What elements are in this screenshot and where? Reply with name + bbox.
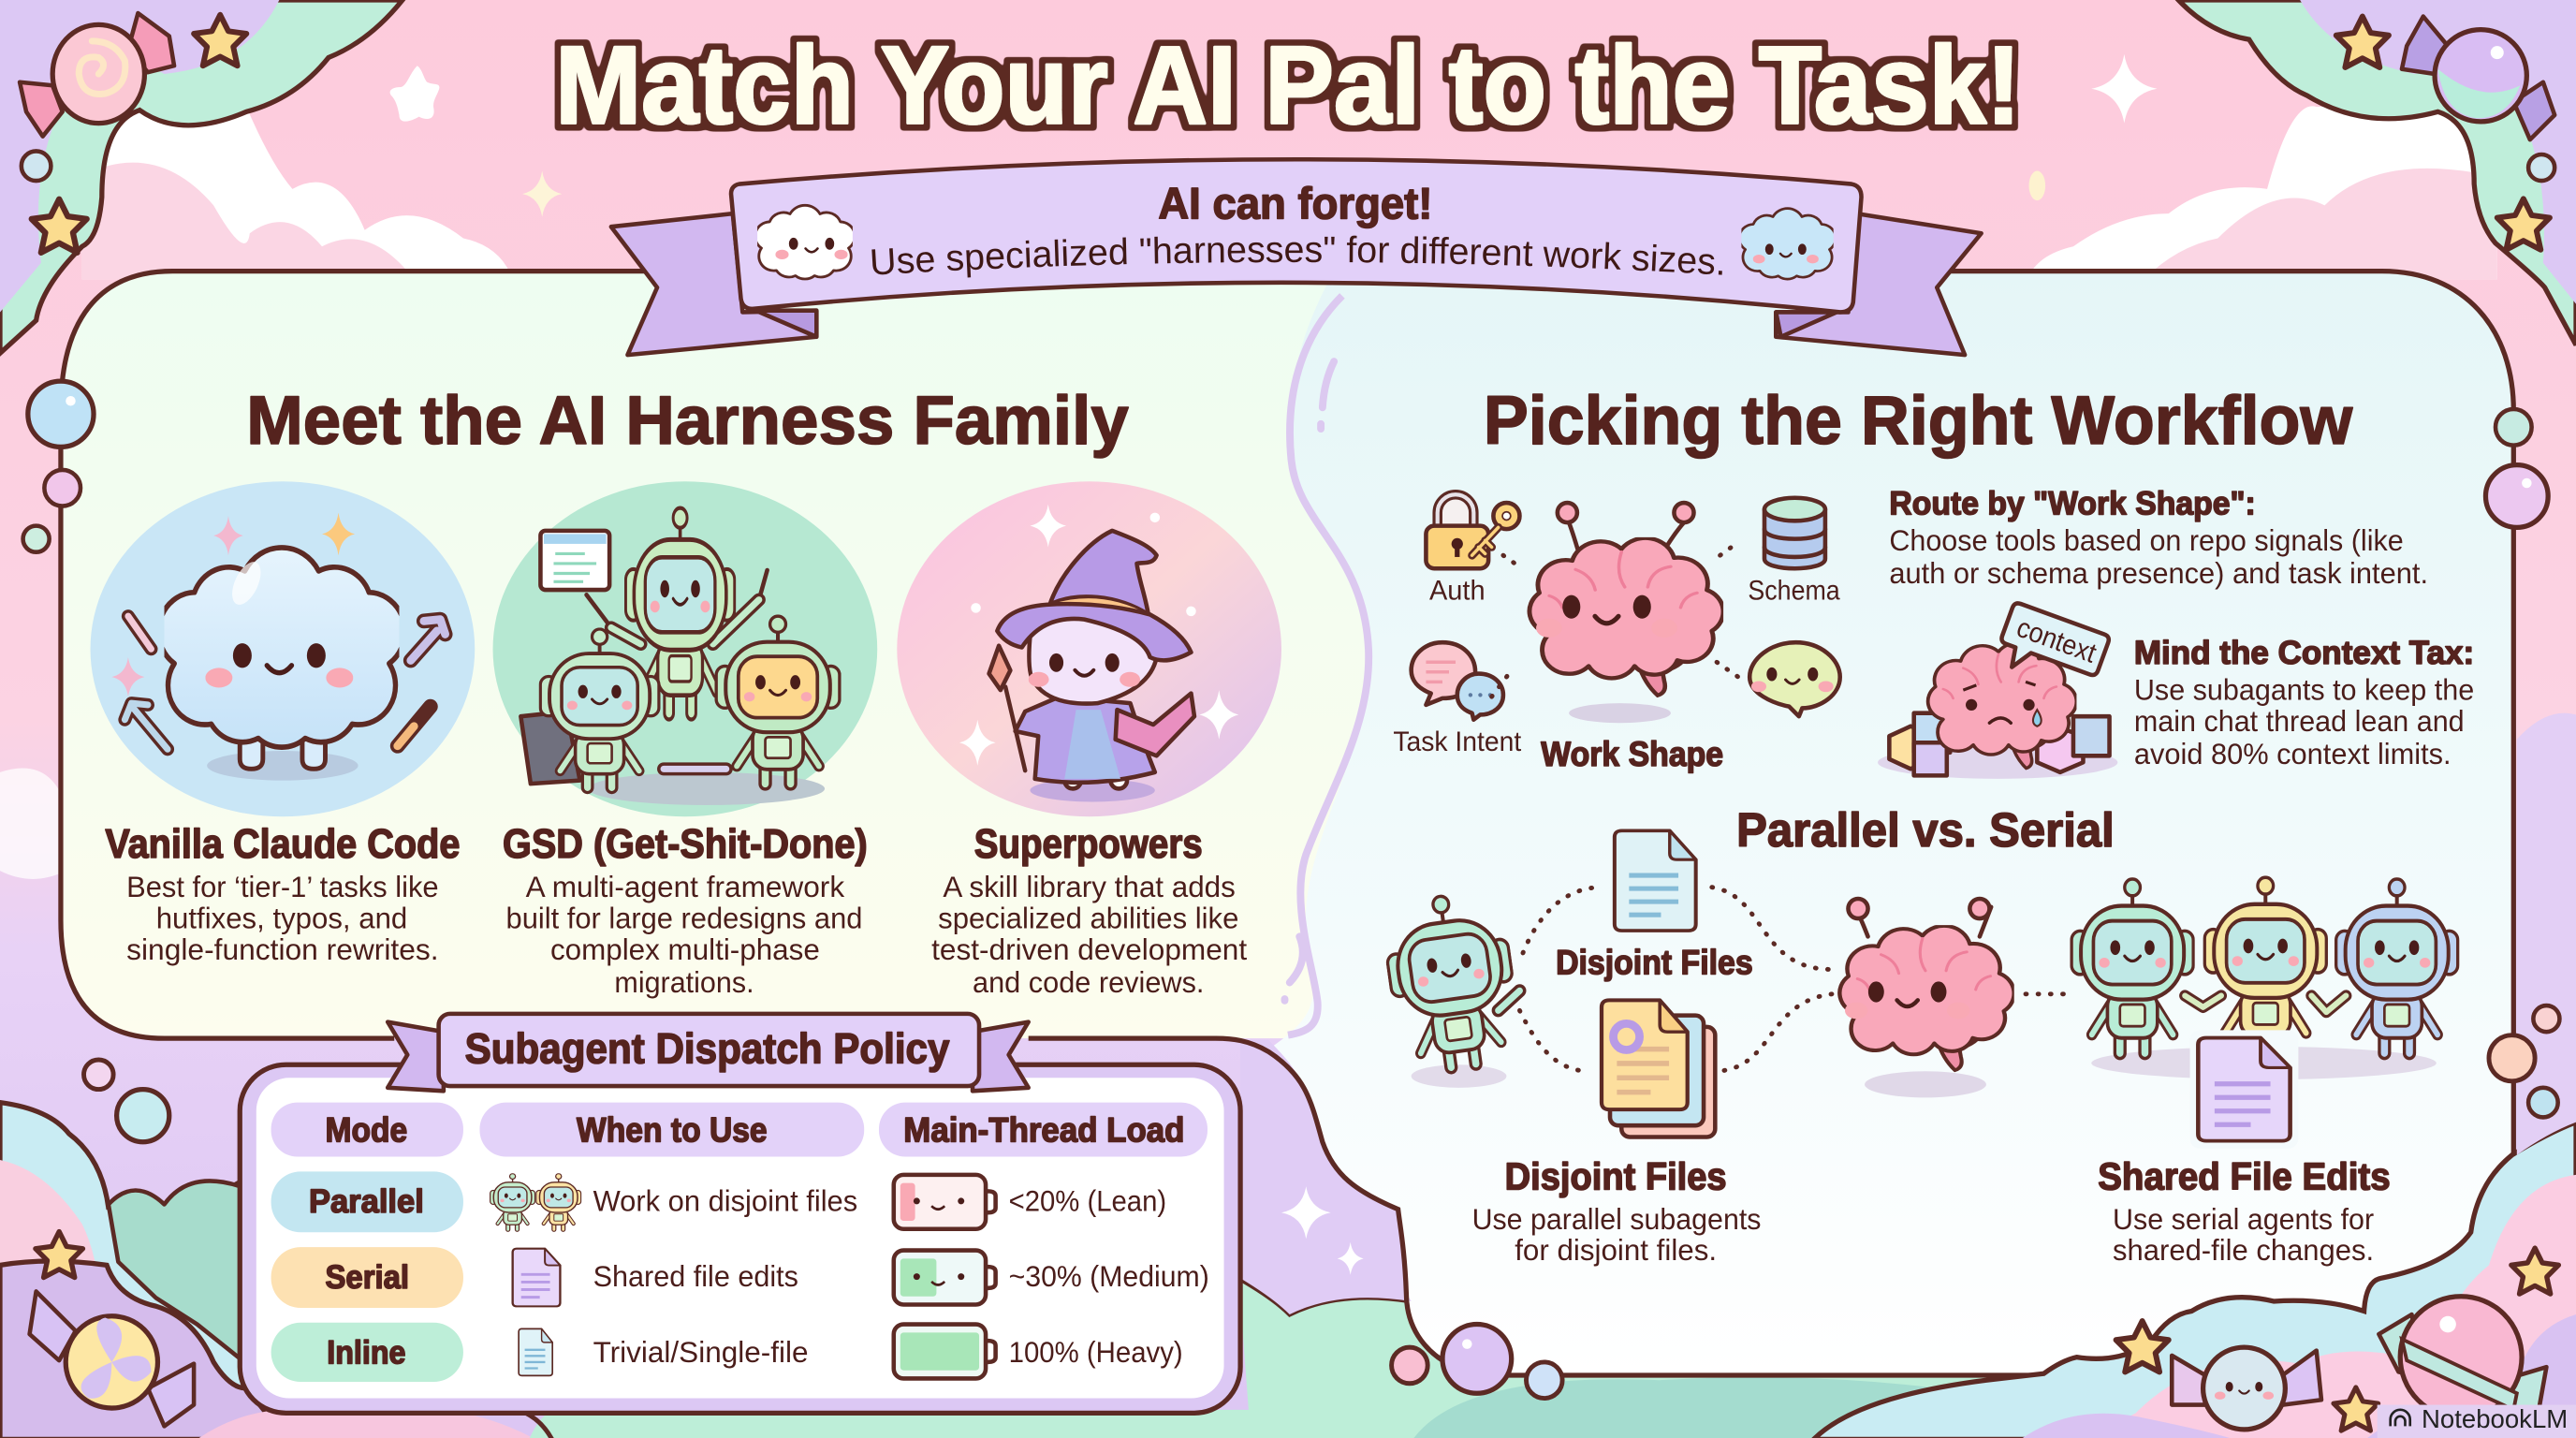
text: shared file edits: Shared File Edits	[2098, 1155, 2391, 1198]
text: Superpowers	[931, 821, 1247, 999]
text: disjoint files	[1472, 1155, 1761, 1267]
text: Vanilla Claude Code: hutfixes, typos, and	[156, 902, 407, 935]
robe	[1016, 697, 1155, 783]
panel outlines	[61, 271, 2513, 1375]
panel: harness family background	[61, 271, 1412, 1038]
panel: workflow background	[1265, 271, 2513, 1375]
connector dots	[1492, 542, 1738, 697]
title: Match Your AI Pal to the Task!	[555, 24, 2021, 147]
icon: chat bubbles	[1412, 642, 1503, 720]
star: bottom right left	[2116, 1321, 2169, 1372]
illustration: vanilla cloud	[91, 481, 475, 816]
header: Main-Thread Load: Main-Thread Load	[903, 1111, 1184, 1150]
text: disjoint files: Use parallel subagents	[1472, 1202, 1761, 1236]
robots: serial team	[2071, 877, 2458, 1053]
text: Vanilla Claude Code: single-function rewrites.	[126, 932, 439, 966]
laptop	[520, 712, 580, 784]
header: Mode	[271, 1103, 463, 1157]
text: shared file edits: shared-file changes.	[2113, 1233, 2374, 1267]
candy: top right	[2402, 17, 2554, 139]
text: disjoint files: for disjoint files.	[1515, 1233, 1717, 1267]
banner tail: right	[973, 1022, 1029, 1091]
load text: lean: <20% (Lean)	[1009, 1183, 1166, 1217]
candy: lower left	[30, 1291, 194, 1426]
icon: database	[1764, 498, 1825, 568]
text: GSD	[503, 821, 868, 999]
doc: shared	[2190, 1030, 2298, 1149]
panel: subagent dispatch policy	[240, 1014, 1240, 1413]
mode: Serial	[271, 1247, 463, 1308]
text: route by work shape	[1889, 485, 2428, 590]
book	[1116, 694, 1194, 756]
icon: white cloud	[755, 205, 855, 279]
text: Superpowers: test-driven development	[931, 932, 1247, 966]
star: bottom right lower	[2334, 1387, 2378, 1431]
corner decoration: top right	[2178, 0, 2576, 345]
text: Superpowers: Superpowers	[974, 821, 1203, 867]
label: Auth: Auth	[1429, 576, 1486, 607]
row text: shared: Shared file edits	[593, 1259, 798, 1293]
star: left upper	[32, 199, 87, 253]
NotebookLM attribution	[2378, 1404, 2576, 1438]
brain antennae	[1558, 503, 1694, 559]
text: route by work shape: Route by "Work Shape":	[1889, 485, 2256, 521]
diagram: work shape	[1393, 494, 1840, 773]
text: GSD: complex multi-phase	[550, 932, 820, 966]
wavy divider	[1288, 296, 1368, 1035]
text: mind the context tax: Mind the Context Tax:	[2134, 635, 2474, 671]
header: When to Use: When to Use	[577, 1111, 768, 1150]
robot: single	[1380, 888, 1524, 1074]
text: Superpowers: A skill library that adds	[943, 870, 1236, 903]
character: brain	[1530, 538, 1723, 696]
heading: parallel vs serial: Parallel vs. Serial	[1736, 803, 2115, 857]
text: shared file edits	[2098, 1155, 2391, 1267]
label: Work Shape: Work Shape	[1541, 735, 1723, 773]
text: GSD: GSD (Get-Shit-Done)	[503, 821, 868, 867]
bubbles: left upper	[22, 151, 94, 552]
illustration: wizard	[897, 481, 1281, 816]
ribbon banner	[608, 157, 1983, 358]
star: top right	[2336, 17, 2389, 67]
text: shared file edits: Use serial agents for	[2113, 1202, 2374, 1236]
text: Superpowers: specialized abilities like	[938, 902, 1238, 935]
context speech bubble: context	[2012, 612, 2100, 669]
heading: workflow: Picking the Right Workflow	[1484, 381, 2353, 459]
icon: blue doc	[519, 1328, 552, 1375]
staff	[1005, 687, 1025, 770]
candy: bottom face candy	[2172, 1347, 2321, 1430]
text: GSD: built for large redesigns and	[506, 902, 862, 935]
text: route by work shape: Choose tools based on repo signals (like	[1889, 523, 2404, 557]
row text: disjoint: Work on disjoint files	[593, 1183, 857, 1217]
hat band	[1045, 598, 1153, 627]
table frame	[240, 1064, 1240, 1413]
illustration: GSD robots	[493, 481, 877, 816]
load text: heavy: 100% (Heavy)	[1009, 1335, 1183, 1369]
context speech bubble	[1993, 602, 2111, 696]
illustration: context tax brain	[1878, 602, 2117, 779]
header: When to Use	[479, 1103, 864, 1157]
wizard feet	[1064, 772, 1127, 788]
ribbon headline: AI can forget!	[1158, 179, 1432, 228]
load text: medium: ~30% (Medium)	[1009, 1259, 1209, 1293]
decorative sparkles	[390, 54, 2157, 1275]
text: GSD: migrations.	[614, 965, 754, 999]
mode: Parallel	[271, 1171, 463, 1232]
label: Task Intent: Task Intent	[1393, 726, 1522, 757]
clouds: lower right	[1814, 713, 2576, 1438]
ribbon tail: right	[1776, 213, 1982, 355]
header: Main-Thread Load	[879, 1103, 1208, 1157]
text: Vanilla Claude Code: Vanilla Claude Code	[105, 821, 460, 867]
doc: disjoint top	[1615, 830, 1696, 931]
text: mind the context tax: main chat thread lean and	[2134, 704, 2465, 738]
battery: medium	[894, 1251, 996, 1304]
banner plate	[439, 1014, 979, 1086]
banner tail: left	[388, 1022, 444, 1091]
NotebookLM attribution: NotebookLM	[2422, 1404, 2568, 1433]
wands	[587, 570, 768, 627]
label: Schema: Schema	[1748, 576, 1840, 607]
banner title: Subagent Dispatch Policy	[465, 1025, 950, 1073]
star: bottom right upper	[2511, 1248, 2558, 1294]
character: center brain	[1839, 899, 2014, 1070]
puzzle parts	[664, 765, 726, 772]
icon: lock and key	[1426, 494, 1519, 568]
code window	[540, 531, 609, 590]
icon: speech face	[1749, 642, 1840, 716]
icon: paired robots	[490, 1174, 581, 1229]
corner decoration: top left	[0, 0, 402, 353]
bubbles: lower left	[84, 1060, 169, 1142]
bubbles: bottom of workflow panel	[1392, 1325, 1562, 1399]
row text: trivial: Trivial/Single-file	[593, 1335, 809, 1369]
battery: lean	[894, 1175, 996, 1229]
text: Vanilla Claude Code	[105, 821, 460, 966]
text: Superpowers: and code reviews.	[973, 965, 1204, 999]
text: route by work shape: auth or schema presence) and task intent.	[1889, 556, 2428, 590]
table body	[256, 1078, 1224, 1399]
candy: striped ball	[2378, 1297, 2546, 1418]
mode: Inline: Inline	[327, 1335, 406, 1372]
lavender gap below the harness panel	[1240, 1040, 1412, 1314]
raised arms	[611, 600, 759, 644]
brain shadow	[1569, 703, 1671, 723]
text: GSD: A multi-agent framework	[526, 870, 844, 903]
heading: harness family: Meet the AI Harness Family	[246, 381, 1129, 459]
clouds: lower left	[0, 1103, 535, 1438]
ribbon subtext: Use specialized "harnesses" for different work sizes.	[871, 236, 1722, 277]
doc stack	[1602, 1000, 1715, 1137]
icon: lavender doc	[513, 1249, 560, 1306]
hat brim	[997, 604, 1191, 660]
mode: Parallel: Parallel	[309, 1183, 424, 1220]
text: disjoint files: Disjoint Files	[1505, 1155, 1727, 1198]
ribbon band	[731, 159, 1862, 312]
candy: top left	[20, 13, 174, 137]
connector dots	[1519, 888, 2073, 1071]
mode: Inline	[271, 1323, 463, 1382]
diagram: parallel vs serial	[1380, 830, 2458, 1149]
clouds: bottom mint hills	[526, 1278, 2054, 1438]
icon: blue cloud	[1739, 209, 1836, 279]
text: Vanilla Claude Code: Best for ‘tier-1’ tasks like	[126, 870, 439, 903]
text: mind the context tax	[2134, 635, 2474, 770]
shadows	[1412, 1047, 2437, 1097]
battery: heavy	[894, 1325, 996, 1378]
ribbon tail: left	[611, 213, 816, 355]
hat cone	[1050, 531, 1157, 614]
header: Mode: Mode	[326, 1111, 407, 1150]
ribbon folds	[755, 311, 1837, 337]
mode: Serial: Serial	[326, 1259, 409, 1296]
text: mind the context tax: Use subagants to keep the	[2134, 673, 2474, 707]
bubbles: right side	[2485, 154, 2559, 1117]
head	[1029, 607, 1157, 704]
star: top left	[194, 15, 246, 66]
label: disjoint files mid: Disjoint Files	[1556, 944, 1753, 982]
text: mind the context tax: avoid 80% context limits.	[2134, 737, 2452, 770]
star: right upper	[2497, 198, 2550, 250]
star: lower left	[36, 1232, 82, 1278]
